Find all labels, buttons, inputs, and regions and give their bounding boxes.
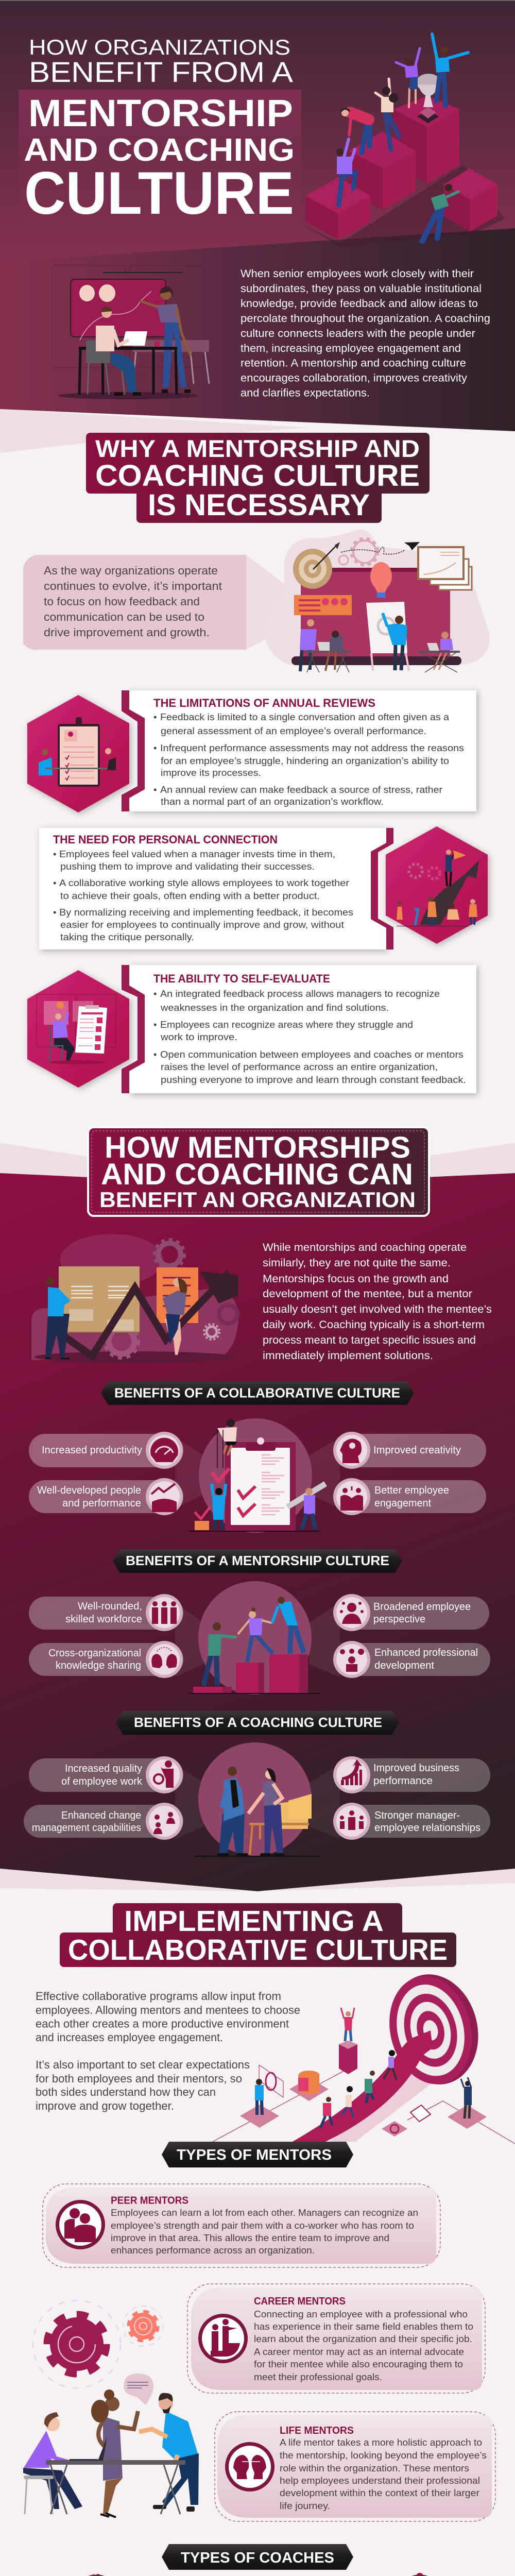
body text: collaborative programs: each other creates a more productive environment bbox=[36, 2018, 289, 2030]
panel: need for personal connection: Employees feel valued when a manager invests time in them, bbox=[59, 849, 335, 859]
panel: life mentors: help employees understand their professional bbox=[280, 2475, 480, 2486]
icon: peers bbox=[56, 2200, 105, 2249]
person: woman in purple cheering bbox=[396, 48, 420, 107]
benefit: cross-organizational knowledge sharing bbox=[29, 1641, 183, 1678]
maroon benefits section background bbox=[0, 1143, 515, 1891]
desk with laptop bbox=[79, 331, 177, 395]
banner: benefits of a collaborative culture bbox=[101, 1381, 414, 1405]
intro callout panel: continues to evolve, it’s important bbox=[44, 580, 222, 592]
intro callout panel: communication can be used to bbox=[44, 611, 204, 623]
heading: how mentorships and coaching can benefit an organization: AND COACHING CAN bbox=[101, 1158, 413, 1191]
benefit: increased productivity: Increased productivity bbox=[42, 1445, 142, 1456]
intro text: and clarifies expectations. bbox=[241, 386, 370, 399]
panel: peer mentors: improve in that area. This allows the entire team to improve and bbox=[111, 2232, 389, 2243]
panel: mentorship culture benefits bbox=[29, 1581, 490, 1694]
panel: need for personal connection: • bbox=[53, 849, 56, 859]
person: standing woman bbox=[140, 286, 191, 393]
banner: types of coaches bbox=[162, 2544, 353, 2570]
benefit: cross-organizational knowledge sharing: knowledge sharing bbox=[56, 1660, 141, 1671]
panel: need for personal connection bbox=[39, 826, 488, 950]
panel: limitations of annual reviews: improve its processes. bbox=[161, 767, 261, 778]
person: bending helper in pink bbox=[341, 109, 370, 152]
body text: mentorship vs coaching: usually doesn’t get involved with the mentee’s bbox=[263, 1303, 492, 1315]
benefit: well-rounded, skilled workforce: Well-rounded, bbox=[78, 1601, 142, 1612]
panel: life mentors: A life mentor takes a more holistic approach to bbox=[280, 2437, 482, 2448]
panel: ability to self-evaluate: pushing everyone to improve and learn through constant feedback. bbox=[161, 1074, 466, 1085]
panel: ability to self-evaluate: Open communication between employees and coaches or mentors bbox=[160, 1049, 464, 1060]
heading: why a mentorship and coaching culture is necessary: IS NECESSARY bbox=[148, 488, 370, 522]
panel: peer mentors bbox=[43, 2184, 440, 2267]
benefit: well-developed people bbox=[29, 1478, 183, 1515]
orange cylinder bbox=[298, 2071, 319, 2094]
panel: limitations of annual reviews: • bbox=[153, 711, 157, 722]
icon: hexagon with team and rising arrow bbox=[386, 826, 488, 944]
title: HOW ORGANIZATIONS bbox=[29, 35, 290, 59]
person: purple shirt with pencil bbox=[287, 1484, 325, 1529]
benefit: increased quality of employee work bbox=[29, 1756, 183, 1793]
panel: life mentors: the mentorship, looking beyond the employee’s bbox=[280, 2450, 487, 2461]
benefit: stronger manager-employee relationships: Stronger manager- bbox=[374, 1810, 460, 1821]
pedestal with cheering person bbox=[339, 2008, 357, 2074]
panel: limitations of annual reviews: • bbox=[153, 784, 157, 795]
body text: collaborative programs bbox=[36, 1990, 300, 2112]
body text: mentorship vs coaching: daily work. Coaching typically is a short-term bbox=[263, 1318, 485, 1331]
icon: big target bbox=[378, 1965, 490, 2094]
panel: limitations of annual reviews: Feedback is limited to a single conversation and often given as a bbox=[160, 711, 450, 722]
speech bubble bbox=[124, 2374, 153, 2405]
body text: mentorship vs coaching: process meant to target specific issues and bbox=[263, 1334, 476, 1346]
panel: ability to self-evaluate: • bbox=[153, 1019, 157, 1030]
panel: career mentors: has experience in their same field enables them to bbox=[254, 2321, 473, 2332]
panel: life mentors: development within the context of their larger bbox=[280, 2487, 479, 2498]
orange dashboard bbox=[294, 595, 352, 615]
panel: career mentors: CAREER MENTORS bbox=[254, 2296, 346, 2307]
intro text: knowledge, provide feedback and allow ideas to bbox=[241, 297, 478, 310]
benefit: well-rounded, skilled workforce: skilled workforce bbox=[65, 1614, 142, 1625]
heading: why a mentorship and coaching culture is necessary: WHY A MENTORSHIP AND bbox=[95, 435, 420, 462]
person: woman in beige climbing bbox=[375, 79, 399, 149]
benefit: improved creativity bbox=[333, 1432, 486, 1469]
person: climber in purple bbox=[336, 139, 355, 205]
benefit: broadened employee perspective: Broadened employee bbox=[373, 1601, 471, 1613]
panel: need for personal connection: taking the critique personally. bbox=[60, 931, 194, 942]
panel: internal coaches bbox=[32, 2574, 160, 2576]
panel: limitations of annual reviews: than a normal part of an organization’s workflow. bbox=[161, 796, 384, 807]
benefit: improved creativity: Improved creativity bbox=[373, 1445, 461, 1456]
heading: how mentorships and coaching can benefit an organization: BENEFIT AN ORGANIZATION bbox=[99, 1188, 416, 1212]
body text: collaborative programs: both sides understand how they can bbox=[36, 2086, 216, 2098]
panel: peer mentors: PEER MENTORS bbox=[111, 2195, 188, 2206]
body text: mentorship vs coaching: immediately implement solutions. bbox=[263, 1349, 433, 1362]
title: MENTORSHIP bbox=[28, 92, 293, 134]
person: man in blue shirt bbox=[139, 2393, 199, 2512]
person: woman in grey-purple top bbox=[248, 1768, 284, 1857]
body text: mentorship vs coaching bbox=[263, 1241, 492, 1362]
zigzag arrow bbox=[58, 1273, 229, 1356]
panel: need for personal connection: • bbox=[53, 877, 56, 888]
panel: external coaches bbox=[352, 2573, 488, 2576]
person: blue shirt on top step bbox=[272, 1597, 304, 1654]
title: AND COACHING bbox=[24, 132, 295, 168]
body text: collaborative programs: employees. Allowing mentors and mentees to choose bbox=[36, 2004, 300, 2016]
banner: benefits of a coaching culture bbox=[116, 1711, 399, 1735]
panel: peer mentors: Employees can learn a lot from each other. Managers can recognize an bbox=[111, 2207, 418, 2218]
illustration: three colleagues talking at a table bbox=[23, 2374, 199, 2517]
panel: limitations of annual reviews bbox=[27, 690, 476, 812]
intro text: retention. A mentorship and coaching culture bbox=[241, 357, 466, 369]
person: woman with long hair bbox=[163, 1278, 187, 1355]
illustration: two colleagues at a whiteboard and desk bbox=[52, 265, 209, 399]
person: green shirt pushing cube bbox=[422, 184, 458, 241]
icon: light bulb bbox=[370, 562, 392, 598]
decorative wedge behind heading bbox=[0, 409, 309, 453]
person: man in blue bbox=[45, 1277, 71, 1359]
panel: ability to self-evaluate: Employees can recognize areas where they struggle and bbox=[160, 1019, 413, 1030]
heading: why a mentorship and coaching culture is necessary bbox=[86, 433, 430, 523]
benefit: cross-organizational knowledge sharing: Cross-organizational bbox=[48, 1648, 141, 1659]
person: sitting on top bbox=[217, 1419, 237, 1468]
gift box with check bbox=[195, 1507, 210, 1530]
benefit: better employee engagement: Better employee bbox=[374, 1485, 449, 1496]
illustration: two colleagues with growth zigzag bbox=[31, 1234, 238, 1363]
icon: gears and paper plane bbox=[339, 538, 420, 565]
panel: ability to self-evaluate: • bbox=[153, 988, 157, 999]
title: CULTURE bbox=[24, 159, 294, 227]
panel: coaching culture benefits bbox=[24, 1742, 490, 1857]
benefit: enhanced change management capabilities: management capabilities bbox=[32, 1822, 141, 1834]
illustration: team walking a path to the target bbox=[213, 1965, 515, 2144]
banner: types of mentors bbox=[162, 2142, 353, 2167]
benefit: well-rounded, skilled workforce bbox=[29, 1594, 183, 1631]
table bbox=[46, 2437, 185, 2514]
panel: career mentors bbox=[187, 2284, 485, 2393]
panel: limitations of annual reviews: • bbox=[153, 742, 157, 753]
panel: ability to self-evaluate: THE ABILITY TO SELF-EVALUATE bbox=[153, 972, 330, 985]
person: blue shirt man with sign bbox=[255, 2065, 283, 2115]
tan chart board bbox=[59, 1266, 140, 1333]
intro text: them, increasing employee engagement and bbox=[241, 342, 461, 354]
heading: implementing a collaborative culture: COLLABORATIVE CULTURE bbox=[68, 1934, 448, 1967]
chart cards bbox=[418, 547, 472, 590]
intro text: When senior employees work closely with their bbox=[241, 267, 474, 280]
banner: benefits of a mentorship culture: BENEFITS OF A MENTORSHIP CULTURE bbox=[126, 1553, 389, 1568]
panel: need for personal connection: easier for employees to continually improve and grow, without bbox=[60, 919, 344, 930]
banner: types of mentors: TYPES OF MENTORS bbox=[177, 2147, 332, 2163]
benefit: broadened employee perspective bbox=[333, 1594, 489, 1631]
panel: peer mentors: enhances performance across an organization. bbox=[111, 2245, 315, 2256]
icon: external coaches bbox=[395, 2573, 444, 2576]
icon: life mentor heads bbox=[225, 2442, 274, 2492]
title panel bbox=[19, 90, 301, 239]
benefit: increased productivity bbox=[29, 1432, 183, 1469]
notepad icon bbox=[410, 2105, 431, 2122]
heading: why a mentorship and coaching culture is necessary: COACHING CULTURE bbox=[95, 459, 420, 493]
people walking on the path bbox=[320, 2050, 397, 2128]
person: blue shirt cheering bbox=[432, 34, 468, 106]
banner: benefits of a mentorship culture bbox=[113, 1549, 402, 1573]
icon: internal coaches bbox=[72, 2574, 121, 2576]
body text: collaborative programs: and increases employee engagement. bbox=[36, 2031, 223, 2044]
panel: life mentors bbox=[215, 2412, 495, 2521]
icon: career mentor bbox=[198, 2314, 248, 2363]
body text: collaborative programs: It’s also important to set clear expectations bbox=[36, 2058, 250, 2071]
panel: need for personal connection: pushing them to improve and validating their successes. bbox=[60, 861, 315, 872]
person: seated colleague bbox=[86, 307, 141, 396]
person: green shirt bbox=[203, 1622, 237, 1686]
intro text: culture connects leaders with the people under bbox=[241, 327, 475, 340]
benefit: enhanced change management capabilities bbox=[24, 1803, 183, 1840]
panel: life mentors: life journey. bbox=[280, 2500, 330, 2511]
person: woman in purple dress bbox=[91, 2389, 138, 2517]
illustration: team collaborating around a big screen bbox=[264, 530, 489, 672]
banner: types of coaches: TYPES OF COACHES bbox=[181, 2550, 334, 2566]
panel: ability to self-evaluate: • bbox=[153, 1049, 157, 1060]
panel: limitations of annual reviews: Infrequent performance assessments may not address the reasons bbox=[160, 742, 464, 753]
person: man in blue jacket bbox=[217, 1767, 248, 1857]
illustration: people helping each other up steps bbox=[189, 1597, 320, 1694]
panel: collaborative culture benefits bbox=[29, 1418, 486, 1533]
panel: need for personal connection: A collaborative working style allows employees to work together bbox=[59, 877, 349, 888]
banner: benefits of a coaching culture: BENEFITS OF A COACHING CULTURE bbox=[134, 1715, 382, 1730]
panel: life mentors: role within the organization. These mentors bbox=[280, 2463, 469, 2473]
benefit: enhanced change management capabilities: Enhanced change bbox=[61, 1810, 141, 1821]
benefit: better employee engagement: engagement bbox=[374, 1498, 431, 1509]
panel: peer mentors: employee’s strength and pair them with a co-worker who has room to bbox=[111, 2220, 414, 2231]
body text: mentorship vs coaching: similarly, they are not quite the same. bbox=[263, 1257, 451, 1269]
benefit: increased quality of employee work: Increased quality bbox=[65, 1763, 142, 1774]
body text: mentorship vs coaching: development of the mentee, but a mentor bbox=[263, 1287, 472, 1300]
intro callout panel: drive improvement and growth. bbox=[44, 626, 210, 639]
heading: how mentorships and coaching can benefit an organization bbox=[88, 1127, 429, 1216]
body text: collaborative programs: Effective collaborative programs allow input from bbox=[36, 1990, 281, 2003]
intro text bbox=[241, 267, 490, 399]
icon: gears bbox=[33, 2300, 163, 2388]
benefit: well-developed people: Well-developed people bbox=[37, 1485, 141, 1496]
person: purple shirt stepping up bbox=[238, 1607, 273, 1662]
easel bbox=[366, 602, 409, 671]
panel: limitations of annual reviews: An annual review can make feedback a source of stress, rather bbox=[160, 784, 442, 795]
panel: need for personal connection: THE NEED FOR PERSONAL CONNECTION bbox=[53, 833, 278, 846]
panel: career mentors: learn about the organization and their specific job. bbox=[254, 2333, 472, 2344]
benefit: improved business performance bbox=[333, 1756, 490, 1793]
orange chart board bbox=[157, 1267, 198, 1323]
body text: collaborative programs: improve and grow together. bbox=[36, 2099, 174, 2112]
intro text: encourages collaboration, improves creativity bbox=[241, 372, 467, 384]
benefit: enhanced professional development: Enhanced professional bbox=[374, 1647, 478, 1658]
benefit: enhanced professional development: development bbox=[374, 1660, 434, 1671]
body text: mentorship vs coaching: While mentorships and coaching operate bbox=[263, 1241, 467, 1253]
panel: life mentors: LIFE MENTORS bbox=[280, 2425, 354, 2436]
title: BENEFIT FROM A bbox=[29, 56, 294, 88]
panel: need for personal connection: to achieve their goals, often ending with a better product. bbox=[60, 890, 320, 901]
illustration: clipboard with team bbox=[189, 1419, 325, 1532]
panel: career mentors: meet their professional goals. bbox=[254, 2371, 382, 2382]
illustration: handshake at office desk bbox=[195, 1767, 320, 1857]
benefit: stronger manager-employee relationships bbox=[333, 1803, 490, 1840]
panel: need for personal connection: • bbox=[53, 907, 56, 918]
heading: implementing a collaborative culture: IMPLEMENTING A bbox=[124, 1905, 384, 1938]
banner: benefits of a collaborative culture: BENEFITS OF A COLLABORATIVE CULTURE bbox=[114, 1385, 400, 1400]
panel: ability to self-evaluate: An integrated feedback process allows managers to recognize bbox=[160, 988, 440, 999]
panel: ability to self-evaluate: work to improve. bbox=[160, 1031, 237, 1042]
benefit: increased quality of employee work: of employee work bbox=[61, 1776, 143, 1787]
person: navy man holding target bbox=[461, 2077, 472, 2119]
benefit: stronger manager-employee relationships: employee relationships bbox=[374, 1822, 480, 1834]
panel: career mentors: for their mentee while also encouraging them to bbox=[254, 2359, 463, 2369]
person: blue shirt reaching up bbox=[212, 1484, 226, 1529]
benefit: better employee engagement bbox=[333, 1478, 486, 1515]
body text: mentorship vs coaching: Mentorships focus on the growth and bbox=[263, 1273, 449, 1285]
benefit: broadened employee perspective: perspective bbox=[373, 1614, 425, 1625]
person: purple sweater bbox=[23, 2412, 82, 2514]
header section bbox=[0, 0, 515, 431]
intro callout panel bbox=[23, 555, 309, 650]
body text: collaborative programs: for both employees and their mentors, so bbox=[36, 2072, 242, 2085]
people at desks bbox=[300, 613, 460, 672]
panel: limitations of annual reviews: general assessment of an employee’s overall performance. bbox=[161, 725, 426, 736]
panel: need for personal connection: By normalizing receiving and implementing feedback, it becomes bbox=[59, 907, 353, 918]
panel: limitations of annual reviews: THE LIMITATIONS OF ANNUAL REVIEWS bbox=[153, 697, 375, 709]
panel: ability to self-evaluate: raises the level of performance across an entire organization, bbox=[161, 1061, 438, 1072]
icon: target with dart bbox=[293, 542, 340, 589]
panel: ability to self-evaluate bbox=[27, 965, 476, 1093]
panel: limitations of annual reviews: for an employee’s struggle, hindering an organization’s ability to bbox=[161, 755, 449, 766]
intro text: percolate throughout the organization. A coaching bbox=[241, 312, 490, 325]
panel: career mentors: Connecting an employee with a professional who bbox=[254, 2309, 468, 2319]
intro callout panel: As the way organizations operate bbox=[44, 564, 218, 577]
heading: implementing a collaborative culture bbox=[60, 1903, 456, 1967]
illustration: podium with climbing team and trophy bbox=[301, 34, 505, 246]
panel: career mentors: A career mentor may act as an internal advocate bbox=[254, 2346, 464, 2357]
benefit: improved business performance: Improved business bbox=[373, 1762, 459, 1774]
icon: hexagon with clipboard review bbox=[27, 695, 129, 812]
benefit: improved business performance: performance bbox=[373, 1775, 433, 1787]
intro callout panel: to focus on how feedback and bbox=[44, 595, 200, 608]
heading: how mentorships and coaching can benefit an organization: HOW MENTORSHIPS bbox=[105, 1131, 410, 1164]
icon: trophy bbox=[416, 74, 441, 123]
arrow path into target bbox=[293, 2030, 433, 2142]
panel: ability to self-evaluate: weaknesses in the organization and find solutions. bbox=[160, 1002, 389, 1013]
benefit: enhanced professional development bbox=[333, 1641, 490, 1678]
intro text: subordinates, they pass on valuable institutional bbox=[241, 282, 482, 295]
benefit: well-developed people: and performance bbox=[62, 1498, 141, 1509]
title bbox=[24, 35, 295, 227]
icon: hexagon with self-evaluation checklist bbox=[27, 970, 129, 1088]
